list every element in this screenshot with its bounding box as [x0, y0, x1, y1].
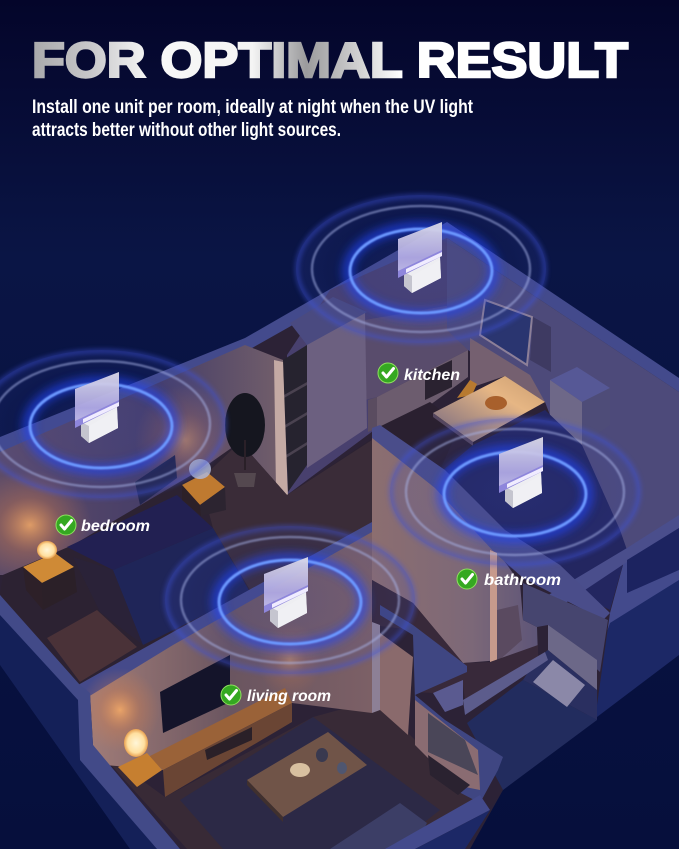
tv console: [148, 688, 292, 797]
shelves: [428, 713, 478, 775]
label: living room: [221, 685, 331, 705]
bed: [67, 495, 250, 645]
coffee table: [247, 732, 367, 822]
title: FOR OPTIMAL RESULT: [32, 34, 628, 88]
bathroom floor: [435, 410, 627, 610]
glow behind standing lamp: [258, 622, 322, 698]
storage shelves: [283, 345, 307, 492]
lower right exterior: [415, 790, 503, 849]
device: living room: [264, 557, 308, 628]
fruit bowl: [485, 396, 507, 410]
bedspread: [467, 680, 597, 790]
headboard wall: [548, 625, 597, 690]
room: bedroom: [0, 345, 372, 685]
headboard: [135, 455, 177, 505]
chair: [457, 380, 477, 398]
kitchen floor: [372, 402, 460, 470]
coverage rings: kitchen: [296, 195, 546, 343]
right lower room: [627, 528, 679, 593]
bedside table right: [182, 472, 226, 516]
dining table: [433, 376, 545, 442]
label: bedroom: bedroom: [81, 518, 150, 535]
label: bathroom: [457, 569, 561, 589]
bed surround: [523, 650, 597, 720]
bedside table left: [23, 553, 77, 610]
left lamp: [37, 541, 57, 559]
label: kitchen: [378, 363, 460, 384]
kitchen counter: [377, 350, 468, 428]
partition end face: [274, 360, 288, 497]
device: kitchen: [398, 222, 442, 293]
room: small bedroom: [433, 625, 597, 790]
rug: [180, 717, 440, 849]
label: bathroom: bathroom: [484, 572, 561, 589]
label: kitchen: kitchen: [404, 367, 460, 384]
exterior wall faces: [0, 610, 175, 849]
tall cabinets: [307, 312, 367, 468]
living room lamp: [124, 729, 148, 757]
potted plant: [225, 393, 265, 487]
coverage rings: bedroom: [0, 350, 226, 498]
curtains: [530, 317, 551, 372]
right lamp wall glow: [135, 385, 235, 495]
label: bedroom: [56, 515, 150, 535]
pillows: [533, 660, 585, 707]
kitchen window: [480, 300, 532, 365]
warm wall under window: [470, 338, 545, 402]
kitchen side wall: [447, 238, 679, 550]
room: kitchen: [283, 238, 679, 550]
left wall top band: [0, 595, 180, 849]
bathroom wall top: [372, 425, 610, 620]
interior floor: [0, 238, 679, 849]
right wall band: [380, 605, 503, 803]
room: bathroom: [372, 410, 679, 700]
outer room wall: [523, 583, 608, 672]
device: bedroom: [75, 372, 119, 443]
alcove wall: [415, 700, 480, 790]
fridge: [550, 367, 610, 445]
corridor floor by plant: [200, 440, 372, 590]
wall top band: [78, 522, 372, 697]
side table: [118, 753, 162, 787]
kitchen back wall: [287, 238, 468, 495]
warm wall above counter: [365, 300, 480, 400]
warm floor rug: [47, 610, 137, 682]
sofa: [330, 803, 427, 849]
subtitle: Install one unit per room, ideally at night when the UV light: [32, 97, 474, 118]
bedroom wall: [0, 345, 287, 575]
lower right wall band: [385, 795, 490, 849]
living room floor: [93, 700, 480, 849]
room: living room: [0, 522, 503, 849]
subtitle: attracts better without other light sources.: [32, 120, 341, 141]
right-hand partition top: [540, 515, 679, 612]
left lamp wall glow: [0, 470, 92, 580]
door: [380, 633, 413, 735]
lamp wall glow: [80, 668, 160, 752]
low wall: [463, 652, 548, 715]
bedroom floor: [0, 440, 372, 685]
top band silhouette: [0, 222, 679, 849]
device: bathroom: [499, 437, 543, 508]
bathroom wall face: [372, 433, 538, 663]
label: living room: living room: [247, 688, 331, 705]
coverage rings: bathroom: [390, 418, 640, 566]
house scene: [0, 222, 679, 849]
corridor floor: [372, 580, 538, 700]
right lamp: [189, 459, 211, 479]
living room wall: [90, 528, 372, 770]
door frame: [490, 550, 497, 662]
tv: [160, 655, 230, 733]
coverage rings: living room: [165, 526, 415, 674]
